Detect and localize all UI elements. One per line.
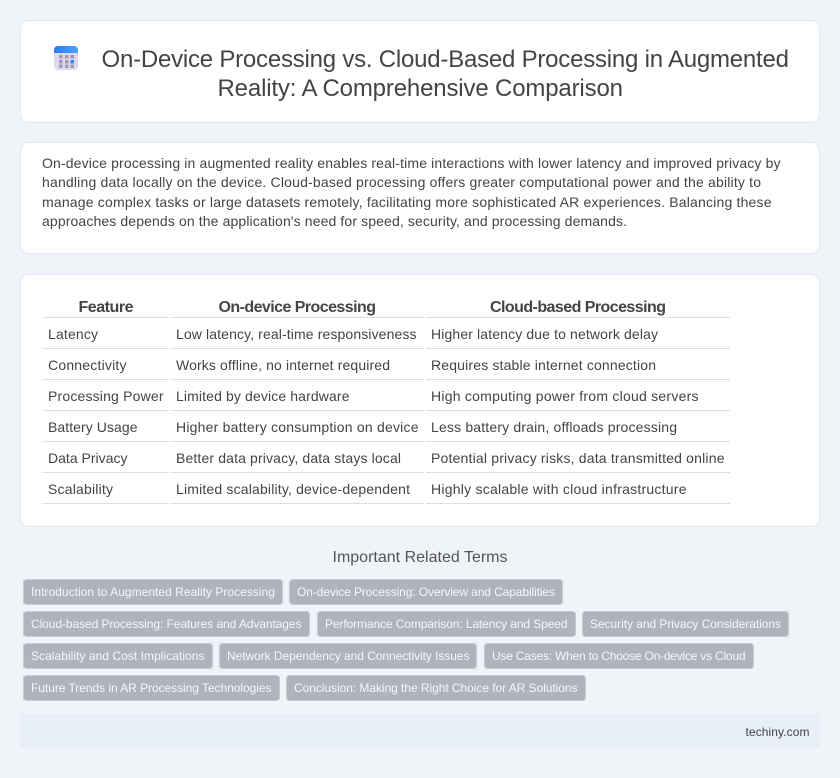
- table row: data privacy: Better data privacy, data stays local: [176, 450, 401, 466]
- table row: scalability: Limited scalability, device-dependent: [176, 481, 410, 497]
- table header row: Feature: [78, 299, 134, 316]
- tag: performance comparison: Performance Comparison: Latency and Speed: [325, 617, 568, 631]
- table row: latency: Latency: [48, 326, 98, 342]
- tag: scalability and cost: [24, 644, 212, 668]
- table row: data privacy: [48, 450, 725, 466]
- table row: scalability: Highly scalable with cloud infrastructure: [431, 481, 687, 497]
- tag: introduction: Introduction to Augmented Reality Processing: [31, 585, 275, 599]
- table row: latency: [48, 326, 658, 342]
- tag: cloud-based features: Cloud-based Processing: Features and Advantages: [31, 617, 302, 631]
- tag: cloud-based features: [24, 612, 310, 636]
- icon: calendar: [54, 46, 78, 70]
- table row: scalability: Scalability: [48, 481, 113, 497]
- panel: comparison table: [20, 274, 820, 526]
- tag: introduction: [24, 580, 282, 604]
- tag: conclusion: Conclusion: Making the Right Choice for AR Solutions: [294, 681, 578, 695]
- tag: scalability and cost: Scalability and Cost Implications: [31, 649, 204, 663]
- table row: battery usage: Higher battery consumption on device: [176, 419, 419, 435]
- tag: on-device overview: [290, 580, 562, 604]
- table row: connectivity: Works offline, no internet required: [176, 357, 390, 373]
- tag: future trends: [24, 676, 280, 700]
- table row: battery usage: [48, 419, 677, 435]
- panel: introduction: [20, 142, 820, 254]
- tag: conclusion: [286, 676, 586, 700]
- table row: data privacy: Potential privacy risks, data transmitted online: [431, 450, 725, 466]
- table row: battery usage: Battery Usage: [48, 419, 138, 435]
- table header row: Cloud-based Processing: [490, 299, 666, 316]
- table header row: On-device Processing: [218, 299, 376, 316]
- title: On-Device Processing vs. Cloud-Based Processing in Augmented: [102, 46, 789, 73]
- table row: connectivity: Requires stable internet connection: [431, 357, 656, 373]
- heading: important related terms: Important Related Terms: [332, 549, 508, 566]
- tag: security and privacy: Security and Privacy Considerations: [590, 617, 781, 631]
- table row: processing power: Processing Power: [48, 388, 164, 404]
- text block: introduction: approaches depends on the application's need for speed, security, and processing demands.: [42, 213, 627, 229]
- tag: on-device overview: On-device Processing: Overview and Capabilities: [297, 585, 555, 599]
- table row: data privacy: Data Privacy: [48, 450, 128, 466]
- tag: security and privacy: [582, 612, 788, 636]
- tag: network dependency: [220, 644, 476, 668]
- table row: scalability: [48, 481, 687, 497]
- tag: use cases: [484, 644, 754, 668]
- tag list: related terms: [24, 580, 788, 700]
- table row: connectivity: Connectivity: [48, 357, 126, 373]
- table row: processing power: High computing power from cloud servers: [431, 388, 698, 404]
- tag: network dependency: Network Dependency and Connectivity Issues: [227, 649, 470, 663]
- table row: battery usage: Less battery drain, offloads processing: [431, 419, 677, 435]
- table row: processing power: [48, 388, 698, 404]
- text block: introduction: manage complex tasks or large datasets remotely, facilitating more sophisticated AR experiences. Balancing these: [42, 194, 772, 210]
- footer: [20, 714, 820, 748]
- tag: use cases: Use Cases: When to Choose On-device vs Cloud: [492, 649, 746, 663]
- tag: future trends: Future Trends in AR Processing Technologies: [31, 681, 272, 695]
- panel: header: [20, 20, 820, 122]
- table row: latency: Low latency, real-time responsiveness: [176, 326, 416, 342]
- title: [102, 46, 789, 102]
- text block: introduction: handling data locally on the device. Cloud-based processing offers greater computational power and the ability to: [42, 174, 761, 190]
- text block: introduction: On-device processing in augmented reality enables real-time interactions with lower latency and improved privacy by: [42, 155, 780, 171]
- table row: latency: Higher latency due to network delay: [431, 326, 658, 342]
- table row: processing power: Limited by device hardware: [176, 388, 350, 404]
- footer text: techiny.com: techiny.com: [746, 725, 810, 739]
- table header row: [78, 299, 666, 316]
- tag: performance comparison: [318, 612, 576, 636]
- text block: introduction: [42, 155, 780, 229]
- title: Reality: A Comprehensive Comparison: [218, 75, 623, 102]
- table row: connectivity: [48, 357, 656, 373]
